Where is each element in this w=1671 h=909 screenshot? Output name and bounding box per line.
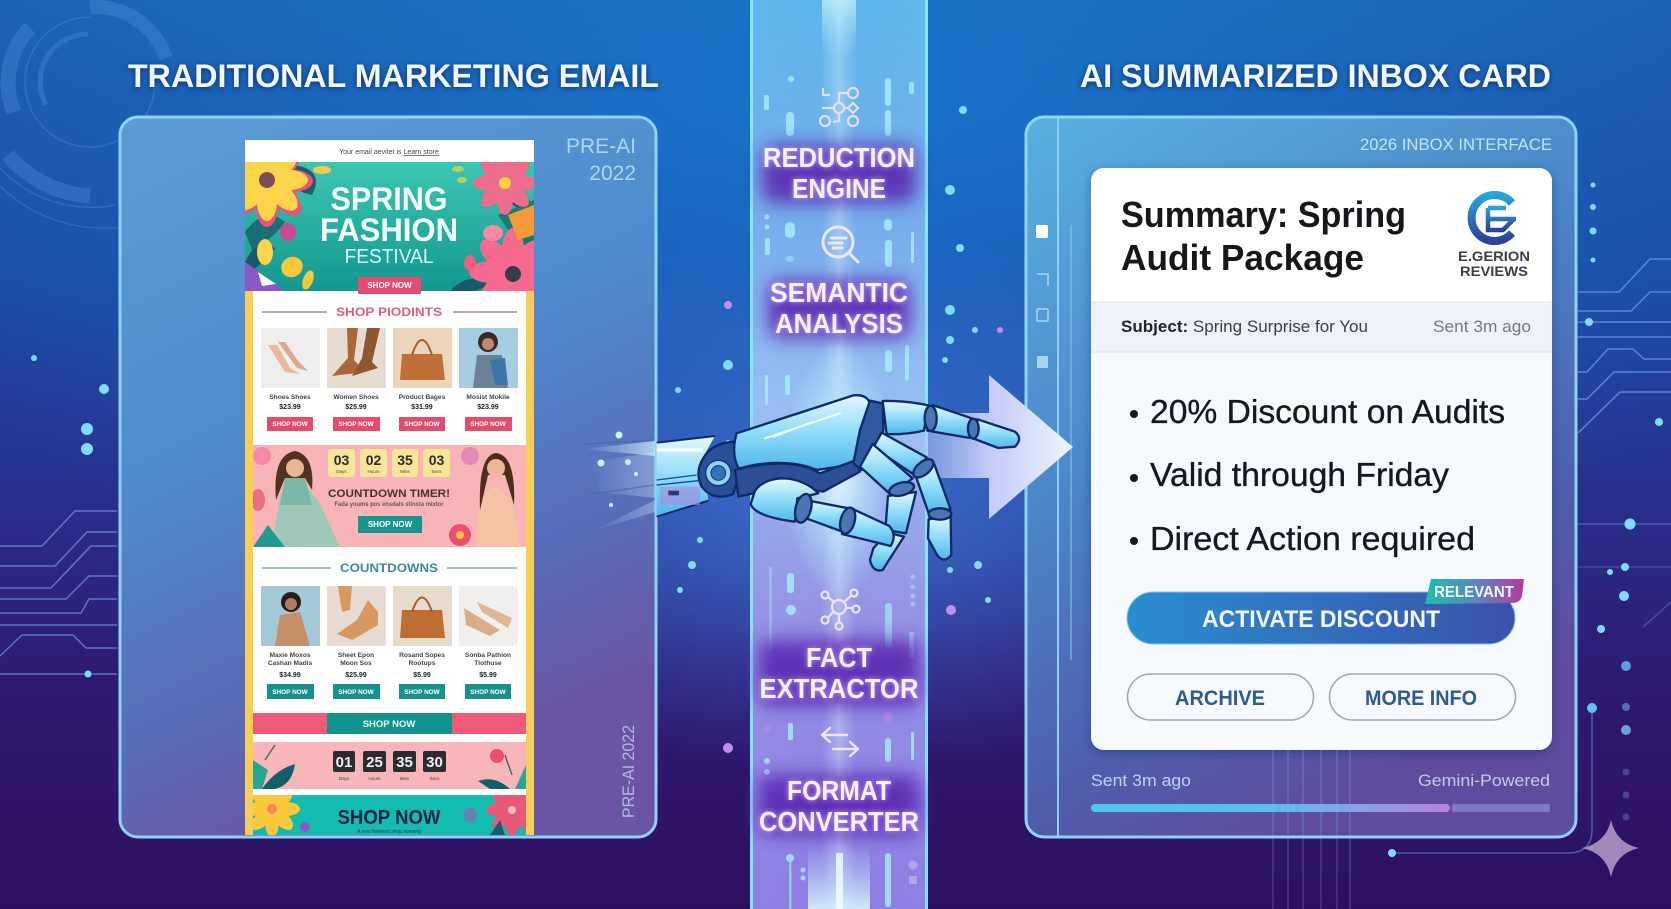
- vertical pre-ai label: PRE-AI 2022: [619, 725, 638, 818]
- shop products section: Women Shoes: [333, 394, 379, 401]
- product photos row one: [261, 328, 320, 388]
- subject row: Sent 3m ago: [1433, 317, 1531, 336]
- email preheader: Your email aevitet is Learn store: [339, 149, 439, 156]
- icon: magnifier: [823, 227, 858, 262]
- summary card: [1091, 168, 1552, 750]
- countdowns section: [261, 561, 518, 699]
- footer status: Sent 3m ago: [1091, 771, 1191, 790]
- product photos row two: [261, 586, 320, 646]
- label: reduction engine: REDUCTION: [763, 142, 915, 173]
- circuit lines left: [0, 511, 117, 674]
- sparkle: [1582, 820, 1639, 877]
- ring finger: [860, 444, 916, 570]
- hero banner: FASHION: [320, 212, 458, 248]
- relevant tag: [1425, 579, 1524, 604]
- robot hand: [657, 395, 1019, 570]
- second timer banner: 30: [426, 754, 443, 771]
- card title: Audit Package: [1121, 237, 1364, 278]
- label: semantic analysis: ANALYSIS: [775, 308, 903, 339]
- countdown banner: Hours: [367, 469, 380, 474]
- index finger: [883, 401, 1019, 448]
- shop now strip: SHOP NOW: [363, 719, 415, 730]
- second timer banner: 25: [366, 754, 383, 771]
- label: fact extractor: FACT: [806, 642, 872, 673]
- label: semantic analysis: SEMANTIC: [770, 277, 908, 308]
- shop products section: SHOP NOW: [404, 421, 441, 428]
- label: fact extractor: EXTRACTOR: [760, 673, 918, 704]
- hero banner: [245, 162, 534, 294]
- shop products section: SHOP PIODINTS: [336, 305, 442, 319]
- product captions row two: Maxie Moxos: [269, 652, 311, 659]
- bullet list: [1130, 393, 1505, 557]
- shop products section: [261, 305, 518, 431]
- relevant tag: RELEVANT: [1434, 584, 1515, 601]
- label: reduction engine: [763, 142, 915, 204]
- countdown banner: SHOP NOW: [368, 520, 413, 529]
- countdown banner: 02: [366, 452, 381, 468]
- second timer banner: Mins: [400, 776, 410, 781]
- countdowns section: $25.99: [345, 672, 367, 679]
- archive button: ARCHIVE: [1175, 687, 1265, 710]
- progress bar: [1091, 804, 1550, 812]
- pre-ai stamp: 2022: [589, 162, 636, 185]
- countdowns section: SHOP NOW: [272, 689, 309, 696]
- shop products section: $31.99: [411, 404, 433, 411]
- label: format converter: FORMAT: [787, 775, 891, 806]
- countdowns section: SHOP NOW: [404, 689, 441, 696]
- bullet list: 20% Discount on Audits: [1150, 393, 1505, 430]
- product captions row two: Moon Sos: [340, 660, 372, 667]
- countdowns section: SHOP NOW: [470, 689, 507, 696]
- icon: fact network: [822, 590, 860, 630]
- footer status: Gemini-Powered: [1418, 771, 1550, 790]
- second timer banner: [253, 742, 526, 789]
- footer banner: SHOP NOW: [338, 807, 441, 829]
- subject row: Subject: Spring Surprise for You: [1121, 317, 1368, 336]
- icon: format arrows: [822, 728, 858, 756]
- countdowns section: $5.99: [413, 672, 431, 679]
- column data capsules: [763, 76, 918, 909]
- countdown banner: Mins: [400, 469, 410, 474]
- countdown banner: COUNTDOWN TIMER!: [328, 488, 450, 500]
- second timer banner: Secs: [429, 776, 440, 781]
- pre-ai stamp: [566, 135, 636, 185]
- label: format converter: CONVERTER: [759, 806, 919, 837]
- product captions row two: Sonba Pathion: [465, 652, 511, 659]
- product captions row two: Rootups: [409, 660, 436, 667]
- knuckles: [853, 401, 883, 470]
- footer status: [1091, 750, 1550, 836]
- countdown banner: Secs: [431, 469, 442, 474]
- shop products section: SHOP NOW: [272, 421, 309, 428]
- activate button: [1127, 592, 1515, 644]
- second timer banner: Hours: [368, 776, 381, 781]
- second timer banner: 01: [336, 754, 352, 771]
- logo: e.gerion reviews: E.GERION: [1458, 248, 1530, 264]
- interface label: 2026 INBOX INTERFACE: [1360, 135, 1552, 154]
- logo: e.gerion reviews: REVIEWS: [1460, 263, 1528, 279]
- bullet list: Valid through Friday: [1150, 456, 1450, 493]
- label: fact extractor: [760, 642, 918, 704]
- middle finger: [873, 433, 951, 560]
- product captions row two: Rosand Sopes: [399, 652, 445, 659]
- countdown banner: Fada youms pos ensdals stinsta mixtor: [334, 501, 444, 508]
- heading: ai summarized inbox card: AI SUMMARIZED INBOX CARD: [1080, 58, 1551, 94]
- countdown banner: 03: [429, 452, 444, 468]
- timer tiles: [333, 751, 446, 772]
- palm: [734, 395, 870, 470]
- panel: traditional email: [120, 117, 656, 837]
- thumb: [751, 478, 894, 546]
- countdowns section: COUNTDOWNS: [340, 561, 438, 575]
- motion streaks: [583, 432, 655, 530]
- archive button: [1128, 674, 1314, 720]
- product captions row one: Shoes Shoes: [269, 394, 311, 401]
- email mockup: [245, 140, 534, 835]
- countdowns section: SHOP NOW: [338, 689, 375, 696]
- product captions row two: Tlothuse: [474, 660, 502, 667]
- palm underside: [735, 460, 860, 497]
- label: reduction engine: ENGINE: [792, 173, 886, 204]
- shop now strip: [253, 713, 526, 734]
- forearm: [657, 436, 715, 517]
- card title: Summary: Spring: [1121, 194, 1406, 235]
- centre processing column: [750, 0, 928, 909]
- pre-ai stamp: PRE-AI: [566, 135, 636, 158]
- hero banner: SHOP NOW: [367, 281, 412, 290]
- subject row: [1091, 302, 1552, 352]
- countdowns section: $34.99: [279, 672, 301, 679]
- card title: [1121, 194, 1406, 278]
- shop products section: $23.99: [477, 404, 499, 411]
- product captions row two: Sheet Epon: [338, 652, 374, 659]
- footer banner: A new freshest shop evening: [357, 829, 421, 835]
- countdown banner: Days: [336, 469, 347, 474]
- shop products section: Product Bages: [399, 394, 446, 401]
- panel: ai inbox card: [1026, 117, 1576, 837]
- wrist joint: [698, 442, 740, 497]
- bullet list: Direct Action required: [1150, 520, 1475, 557]
- more info button: MORE INFO: [1365, 687, 1477, 710]
- hero button: [358, 277, 421, 294]
- shop products section: SHOP NOW: [338, 421, 375, 428]
- second timer banner: 35: [396, 754, 413, 771]
- label: format converter: [759, 775, 919, 837]
- product captions row two: [268, 652, 511, 667]
- countdown banner: [251, 445, 526, 547]
- second timer banner: Days: [339, 776, 350, 781]
- tech arcs top left: [0, 7, 166, 228]
- shop products section: $25.99: [345, 404, 367, 411]
- heading: traditional marketing email: TRADITIONAL MARKETING EMAIL: [128, 58, 659, 94]
- product buttons row two: [267, 684, 511, 699]
- sidebar rail: [1036, 118, 1071, 836]
- countdown banner: 35: [397, 452, 413, 468]
- hero banner: FESTIVAL: [344, 246, 434, 268]
- shop products section: $23.99: [279, 404, 301, 411]
- transfer arrow: [880, 375, 1073, 519]
- label glows: [758, 145, 920, 835]
- shop products section: Mosist Mokile: [466, 394, 510, 401]
- product buttons row one: [267, 417, 512, 431]
- more info button: [1330, 674, 1516, 720]
- hero title: SPRING: [330, 181, 448, 217]
- countdown tiles: [328, 449, 450, 477]
- product captions row two: Cashan Madis: [268, 660, 312, 667]
- activate button: ACTIVATE DISCOUNT: [1202, 606, 1440, 633]
- countdowns section: $5.99: [479, 672, 497, 679]
- label: semantic analysis: [770, 277, 908, 339]
- logo: e.gerion reviews: [1458, 195, 1530, 279]
- footer banner: [253, 795, 526, 835]
- shop products section: SHOP NOW: [470, 421, 507, 428]
- circuit lines right: [1273, 259, 1671, 909]
- countdown banner: 03: [334, 452, 349, 468]
- icon: reduction network: [820, 88, 858, 126]
